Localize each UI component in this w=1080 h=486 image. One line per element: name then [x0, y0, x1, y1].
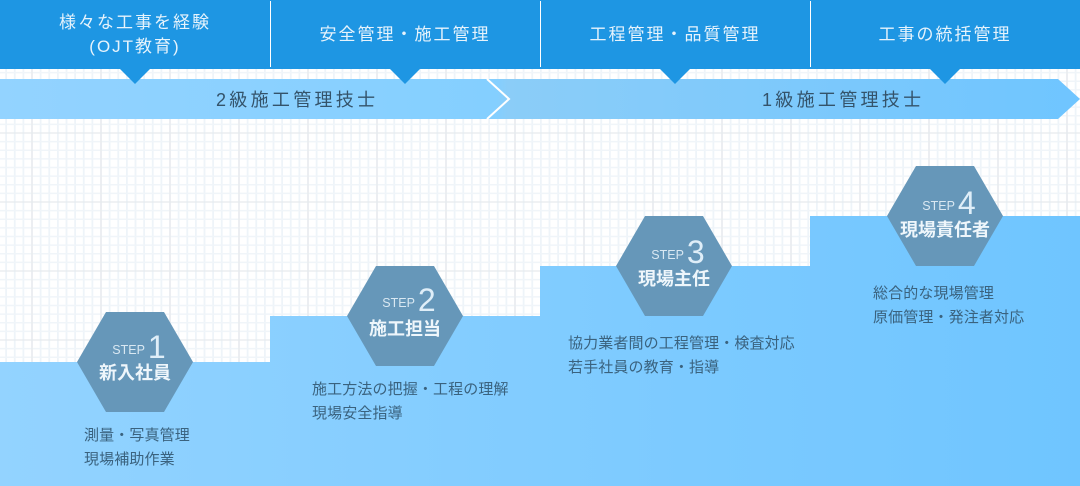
- step 4 badge text: STEP4: [922, 185, 976, 221]
- step 2 description: 現場安全指導: [312, 405, 403, 422]
- step 2 badge text: [369, 282, 441, 339]
- step 4 badge text: [900, 185, 990, 240]
- step 3 description: 若手社員の教育・指導: [568, 359, 719, 376]
- step 3 badge text: 現場主任: [638, 269, 710, 289]
- step 2 description: [312, 381, 509, 422]
- step 2 badge text: STEP2: [382, 282, 436, 318]
- header cell 1: [59, 12, 211, 56]
- header cell 3: 工程管理・品質管理: [590, 24, 760, 44]
- level label: grade 1: 1級施工管理技士: [762, 90, 924, 110]
- header cell 2: 安全管理・施工管理: [320, 24, 490, 44]
- header cell 1: 様々な工事を経験: [59, 12, 211, 32]
- step 2 badge text: 施工担当: [369, 319, 441, 339]
- step 3 badge text: STEP3: [651, 234, 705, 270]
- step 1 description: 測量・写真管理: [84, 427, 190, 444]
- header cell 1: (OJT教育): [89, 36, 181, 56]
- step 4 badge text: 現場責任者: [900, 220, 990, 240]
- step 1 description: [84, 427, 190, 468]
- step 3 description: [568, 335, 795, 376]
- step 1 badge text: STEP1: [112, 329, 166, 365]
- step 4 description: 総合的な現場管理: [873, 285, 994, 302]
- step 1 description: 現場補助作業: [84, 451, 175, 468]
- step 4 description: [873, 285, 1024, 326]
- step 1 badge text: 新入社員: [99, 363, 171, 383]
- step 1 badge text: [99, 329, 171, 383]
- header cell 4: 工事の統括管理: [878, 24, 1012, 44]
- step 2 description: 施工方法の把握・工程の理解: [312, 381, 509, 398]
- step 4 description: 原価管理・発注者対応: [873, 309, 1024, 326]
- level label: grade 2: 2級施工管理技士: [216, 90, 378, 110]
- header band: [0, 0, 1080, 84]
- step 3 description: 協力業者間の工程管理・検査対応: [568, 335, 795, 352]
- step 3 badge text: [638, 234, 710, 289]
